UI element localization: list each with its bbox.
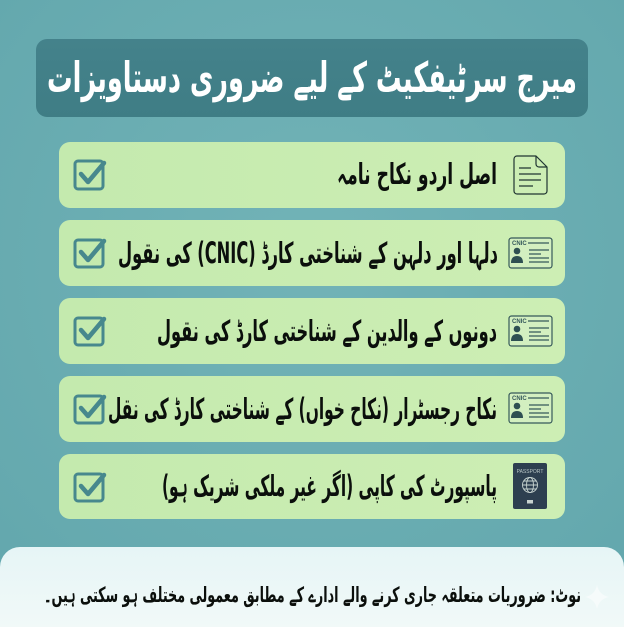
icon: passport: PASSPORT <box>517 469 543 475</box>
icon: passport <box>513 463 547 509</box>
icon: CNIC card: CNIC <box>512 319 527 325</box>
panel: note <box>0 547 624 627</box>
icon: check box <box>75 240 104 267</box>
icon: check box <box>75 318 104 345</box>
icon: check box <box>75 474 104 501</box>
panel: parents CNIC row <box>59 298 565 364</box>
icon: sparkle <box>585 585 609 609</box>
icon: CNIC card <box>509 238 552 268</box>
icon: CNIC card <box>509 393 552 423</box>
icon: check box <box>75 161 104 189</box>
panel: passport row <box>59 454 565 519</box>
icon: CNIC card <box>509 316 552 346</box>
title banner <box>36 39 588 117</box>
row text: اصل اردو نکاح نامہ <box>337 157 497 191</box>
icon: CNIC card: CNIC <box>512 241 527 247</box>
icon: check box <box>75 396 104 423</box>
panel: bride and groom CNIC row <box>59 220 565 286</box>
panel: nikah nama row <box>59 142 565 208</box>
icon: document <box>514 156 547 194</box>
panel: nikah registrar CNIC row <box>59 376 565 442</box>
icon: CNIC card: CNIC <box>512 396 527 402</box>
